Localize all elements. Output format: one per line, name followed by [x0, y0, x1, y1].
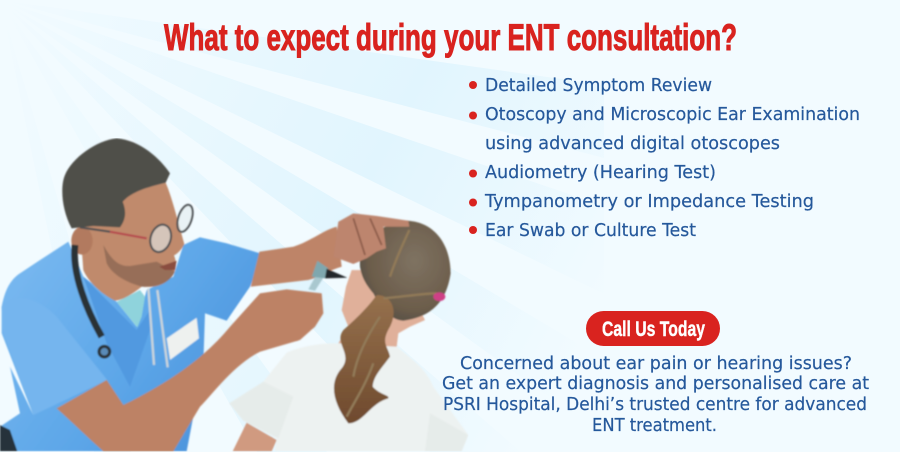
bullet: otoscopy: using advanced digital otoscopes	[485, 133, 780, 154]
checklist of consultation steps	[469, 75, 860, 241]
bullet: otoscopy: Otoscopy and Microscopic Ear Examination	[485, 104, 860, 125]
call to action text: Concerned about ear pain or hearing issues?	[460, 354, 852, 374]
bullet: otoscopy	[469, 104, 860, 154]
name badge	[167, 318, 199, 360]
doctor's neck and face	[80, 183, 184, 301]
bullet: audiometry: Audiometry (Hearing Test)	[485, 162, 716, 183]
girl's dress	[229, 343, 468, 451]
call to action text: ENT treatment.	[592, 416, 717, 436]
girl's neck and ear	[338, 270, 425, 347]
dress lace sleeves	[229, 382, 468, 451]
scrub collar shadow	[83, 277, 150, 387]
ear	[71, 227, 93, 255]
illustration: doctor examining a girl's ear	[0, 138, 468, 451]
girl's arm	[233, 423, 277, 451]
call to action text: PSRI Hospital, Delhi’s trusted centre for advanced	[443, 395, 867, 415]
doctor's forearm and hand	[57, 289, 323, 451]
girl's hair	[360, 221, 451, 321]
undershirt	[117, 290, 145, 327]
otoscope	[308, 261, 347, 291]
doctor's hair	[62, 138, 170, 228]
call button: Call Us Today	[602, 318, 705, 341]
stethoscope	[75, 245, 168, 367]
doctor's scrubs	[0, 237, 260, 451]
chair	[0, 425, 17, 451]
finger shadows	[353, 218, 382, 255]
mouth	[159, 261, 177, 270]
hair tie	[433, 292, 445, 301]
call to action text: Get an expert diagnosis and personalised care at	[442, 374, 869, 394]
sleeve fold	[2, 298, 107, 415]
doctor's raised arm	[251, 227, 342, 287]
bullet: ear swab: Ear Swab or Culture Test	[485, 220, 696, 241]
ponytail	[334, 295, 394, 423]
bullet: detailed symptom review: Detailed Symptom Review	[485, 75, 712, 96]
hand holding girl's head	[333, 213, 409, 264]
bullet: tympanometry: Tympanometry or Impedance Testing	[484, 191, 814, 212]
beard shadow	[103, 245, 175, 287]
glasses	[80, 203, 196, 255]
hair strands	[347, 230, 437, 417]
call to action text	[442, 354, 869, 436]
call button	[586, 311, 720, 346]
